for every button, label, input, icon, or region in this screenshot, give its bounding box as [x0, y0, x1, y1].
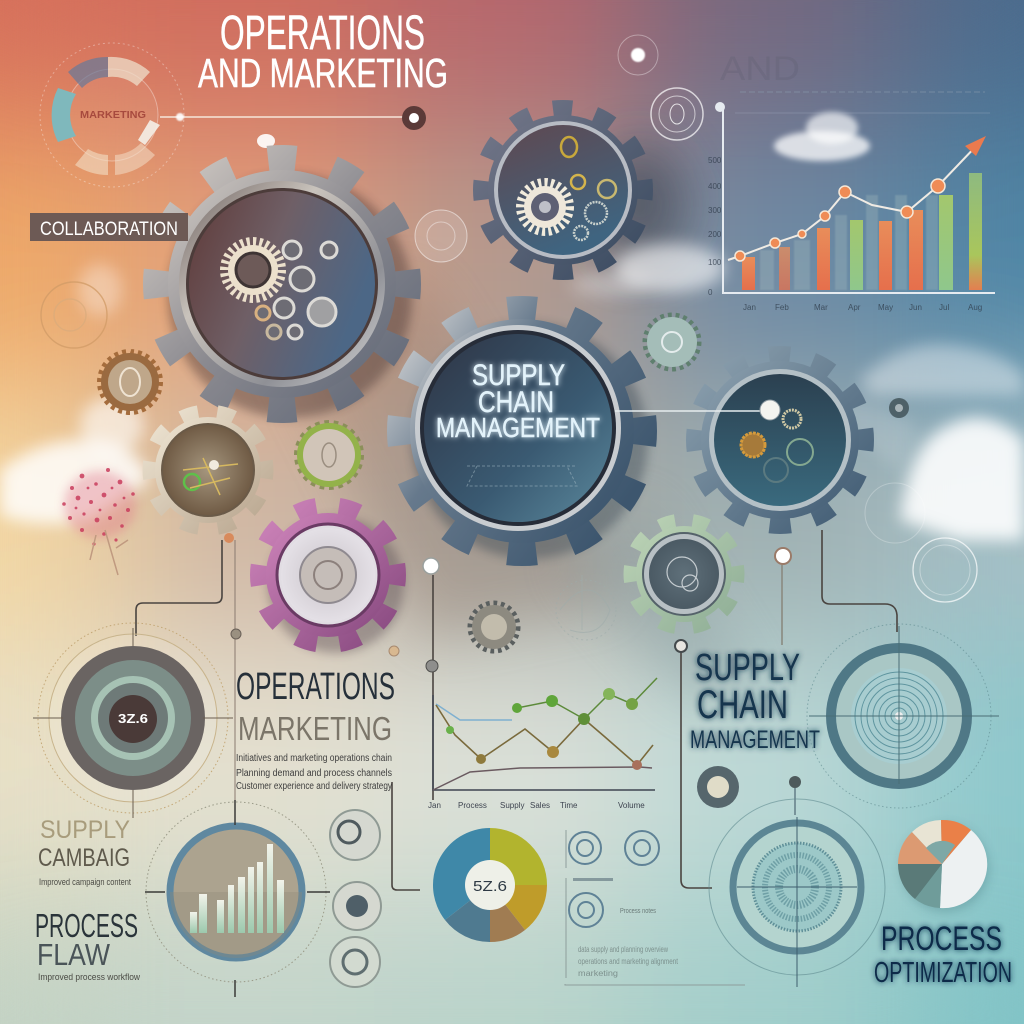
gear: pink [260, 507, 404, 653]
bar and line chart [708, 102, 995, 312]
small grey gear [470, 603, 518, 651]
gear: central blue with title [402, 311, 648, 559]
axis labels: Aug [968, 303, 982, 312]
text block: supply campaign: SUPPLY [40, 816, 130, 844]
legend panel: round icons and notes: marketing [578, 969, 618, 978]
axis labels: 500 [708, 156, 722, 165]
line chart: bottom centre: Jan [428, 801, 441, 810]
radial dial: left: 3Z.6 [118, 711, 148, 726]
title [198, 7, 448, 96]
small dark node right [889, 398, 909, 418]
text block: operations marketing: Customer experience and delivery strategy [236, 781, 392, 792]
inner cogs [521, 137, 616, 240]
clouds [0, 112, 1024, 540]
text block: supply campaign: Improved campaign content [39, 877, 131, 887]
radial dial: right top [807, 624, 999, 808]
text block: supply chain management right [690, 647, 820, 754]
trend line [728, 142, 980, 260]
faded sketch icon [556, 575, 616, 640]
axis labels: Apr [848, 303, 861, 312]
text block: operations marketing: OPERATIONS [236, 666, 395, 708]
legend panel: round icons and notes: operations and marketing alignment [578, 957, 679, 966]
text block: supply chain management right: MANAGEMENT [690, 726, 820, 754]
heading: supply chain management: MANAGEMENT [436, 412, 600, 443]
bars [742, 173, 982, 290]
connectors: left flow lines [136, 530, 897, 890]
axis labels: 300 [708, 206, 722, 215]
node: glowing orb [631, 48, 645, 62]
label: collaboration [30, 213, 188, 241]
title: OPERATIONS [220, 7, 425, 60]
inner cogs: small [256, 241, 337, 339]
gear: large silver top-left [157, 159, 412, 418]
gear: cream [149, 411, 267, 529]
faded heading top right: AND [720, 50, 800, 88]
text block: operations marketing: Planning demand and process channels [236, 768, 392, 779]
heading: supply chain management [436, 359, 600, 443]
text block: process optimization [874, 920, 1012, 989]
line chart: bottom centre: Time [560, 801, 578, 810]
heading: supply chain management: CHAIN [478, 386, 554, 419]
axes [723, 108, 995, 293]
axis labels: Jun [909, 303, 922, 312]
title: AND MARKETING [198, 50, 448, 96]
small teal gear [645, 315, 699, 369]
small knob [697, 766, 739, 808]
heading: supply chain management: SUPPLY [472, 359, 565, 392]
donut chart: 5Z.6 [473, 878, 507, 895]
axis labels: 200 [708, 230, 722, 239]
text block: process flaw: PROCESS [35, 907, 138, 944]
top-left radial dial: MARKETING [80, 110, 146, 121]
gear: sage green [631, 521, 737, 627]
legend panel: round icons and notes: Process notes [620, 908, 656, 915]
line chart: bottom centre: Process [458, 801, 487, 810]
icon: pink blossom tree [62, 468, 136, 575]
legend panel: round icons and notes: data supply and planning overview [578, 945, 668, 954]
connector: centre gear to right gear [615, 400, 780, 420]
gear: blue right [695, 355, 865, 525]
radial dial: left [33, 623, 233, 818]
text block: supply chain management right: SUPPLY [695, 647, 800, 689]
axis labels: May [878, 303, 893, 312]
small brown gear [101, 353, 159, 411]
axis labels: Feb [775, 303, 789, 312]
faint sketch icons [41, 35, 977, 602]
line chart: bottom centre: Sales [530, 801, 550, 810]
axis labels: 100 [708, 258, 722, 267]
axis labels [708, 156, 982, 312]
bars [190, 844, 284, 933]
text block: supply campaign: CAMBAIG [38, 844, 130, 872]
glowing dot [257, 134, 275, 148]
faded background bars [760, 195, 938, 290]
connector: dial to node [160, 106, 426, 130]
text block: operations marketing [236, 666, 395, 792]
line chart: bottom centre [428, 678, 657, 810]
line chart: bottom centre: Supply [500, 801, 524, 810]
text block: supply campaign [38, 816, 131, 887]
text block: supply chain management right: CHAIN [697, 683, 788, 727]
axis labels: Jul [939, 303, 949, 312]
small green gear [297, 423, 361, 487]
donut chart [433, 828, 547, 942]
small marker [789, 776, 801, 815]
axis labels: Jan [743, 303, 756, 312]
text block: process flaw: FLAW [37, 937, 111, 972]
legend panel: round icons and notes [565, 830, 745, 985]
radial mini bar chart [145, 800, 330, 997]
axis labels: 0 [708, 288, 713, 297]
text block: operations marketing: Initiatives and marketing operations chain [236, 753, 392, 764]
axis labels: Mar [814, 303, 828, 312]
radial dial: right bottom [709, 799, 885, 987]
gear: slate top-centre [482, 109, 644, 271]
icons: three small round badges [330, 810, 381, 987]
axis labels: 400 [708, 182, 722, 191]
line chart: bottom centre: Volume [618, 801, 645, 810]
text block: process flaw: Improved process workflow [38, 972, 140, 982]
top-left radial dial [40, 43, 184, 187]
label: collaboration: COLLABORATION [40, 219, 178, 240]
text block: process flaw [35, 907, 140, 982]
connector nodes [224, 533, 791, 672]
pie chart [898, 820, 989, 912]
text block: operations marketing: MARKETING [238, 710, 392, 747]
inner cog: large cream [225, 242, 281, 298]
